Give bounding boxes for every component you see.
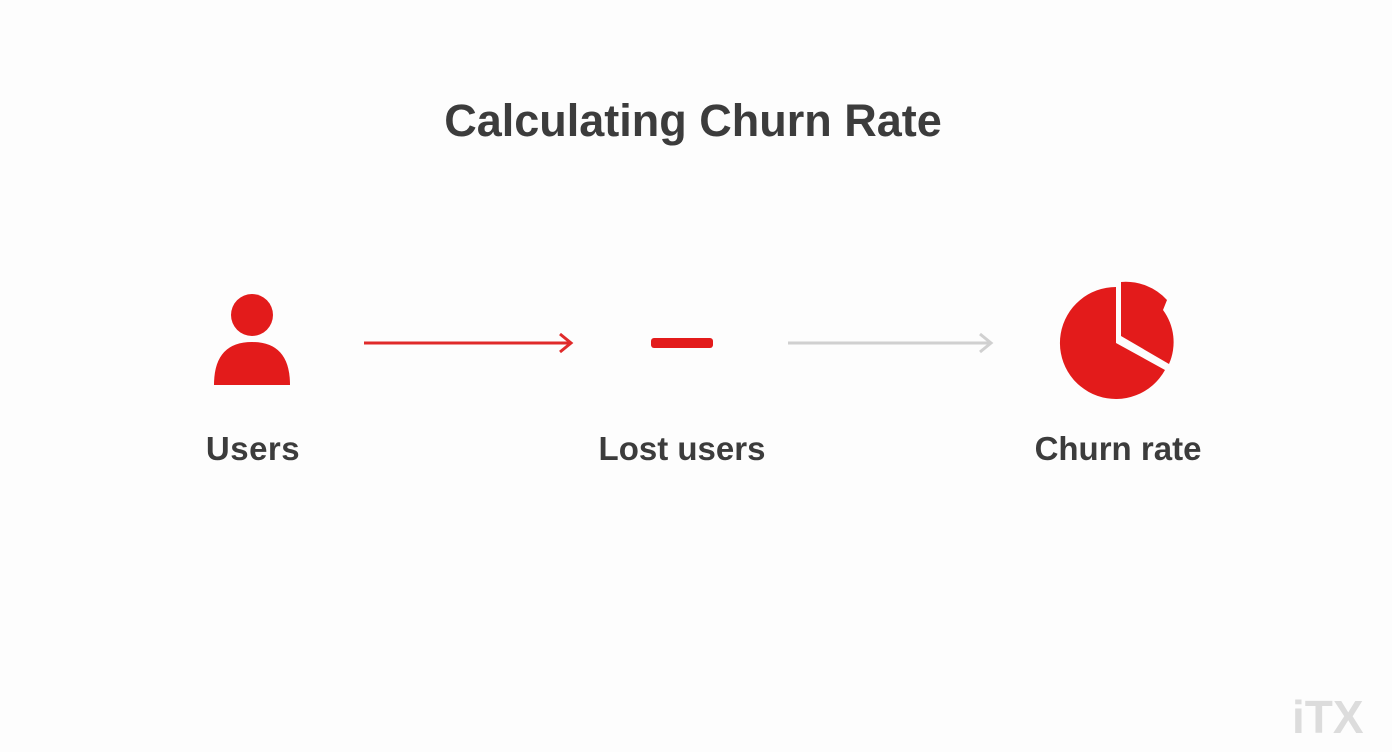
icon: minus [651,338,713,348]
title: Calculating Churn Rate [444,95,942,146]
icon: user [214,294,290,385]
label: users: Users [206,430,300,467]
icon: pie chart [1060,282,1174,399]
label: lost users: Lost users [599,430,765,467]
logo: iTX [1292,691,1364,743]
arrow: red [364,334,571,352]
label: churn rate: Churn rate [1035,430,1201,467]
arrow: grey [788,334,991,352]
